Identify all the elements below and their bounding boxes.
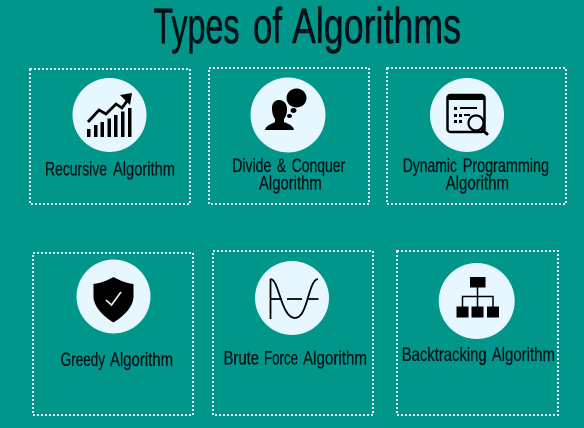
- icon: hierarchy: [456, 277, 499, 318]
- panel: backtracking algorithm: [397, 251, 558, 415]
- icon: table with magnifier: [448, 95, 487, 134]
- title: [154, 0, 461, 54]
- panel: greedy algorithm: [33, 253, 193, 415]
- panel: divide and conquer algorithm: [209, 68, 369, 204]
- label: Algorithm: [113, 158, 175, 180]
- icon: person with thought bubble: [265, 88, 306, 130]
- label: Programming: [463, 155, 549, 177]
- label: &: [277, 155, 286, 177]
- icon: wave graph: [270, 279, 318, 319]
- label: Algorithm: [492, 344, 555, 366]
- panel: brute force algorithm: [213, 251, 373, 415]
- label: Algorithm: [259, 172, 322, 194]
- label: Algorithm: [446, 172, 509, 194]
- panel: dynamic programming algorithm: [387, 68, 566, 204]
- label: Dynamic: [403, 155, 457, 177]
- label: Greedy: [61, 349, 105, 371]
- label: Force: [264, 348, 298, 370]
- icon: shield with check: [94, 277, 134, 322]
- label: Conquer: [292, 155, 346, 177]
- label: [61, 349, 173, 371]
- label: Divide: [232, 155, 271, 177]
- label: Brute: [224, 348, 259, 370]
- icon: rising bar chart: [87, 93, 132, 137]
- label: Backtracking: [402, 344, 487, 366]
- label: [232, 155, 346, 194]
- label: [403, 155, 549, 194]
- label: [45, 158, 175, 180]
- label: Algorithm: [110, 349, 173, 371]
- label: Algorithm: [303, 348, 367, 370]
- label: [224, 348, 367, 370]
- panel: recursive algorithm: [30, 69, 190, 204]
- label: Recursive: [45, 158, 107, 180]
